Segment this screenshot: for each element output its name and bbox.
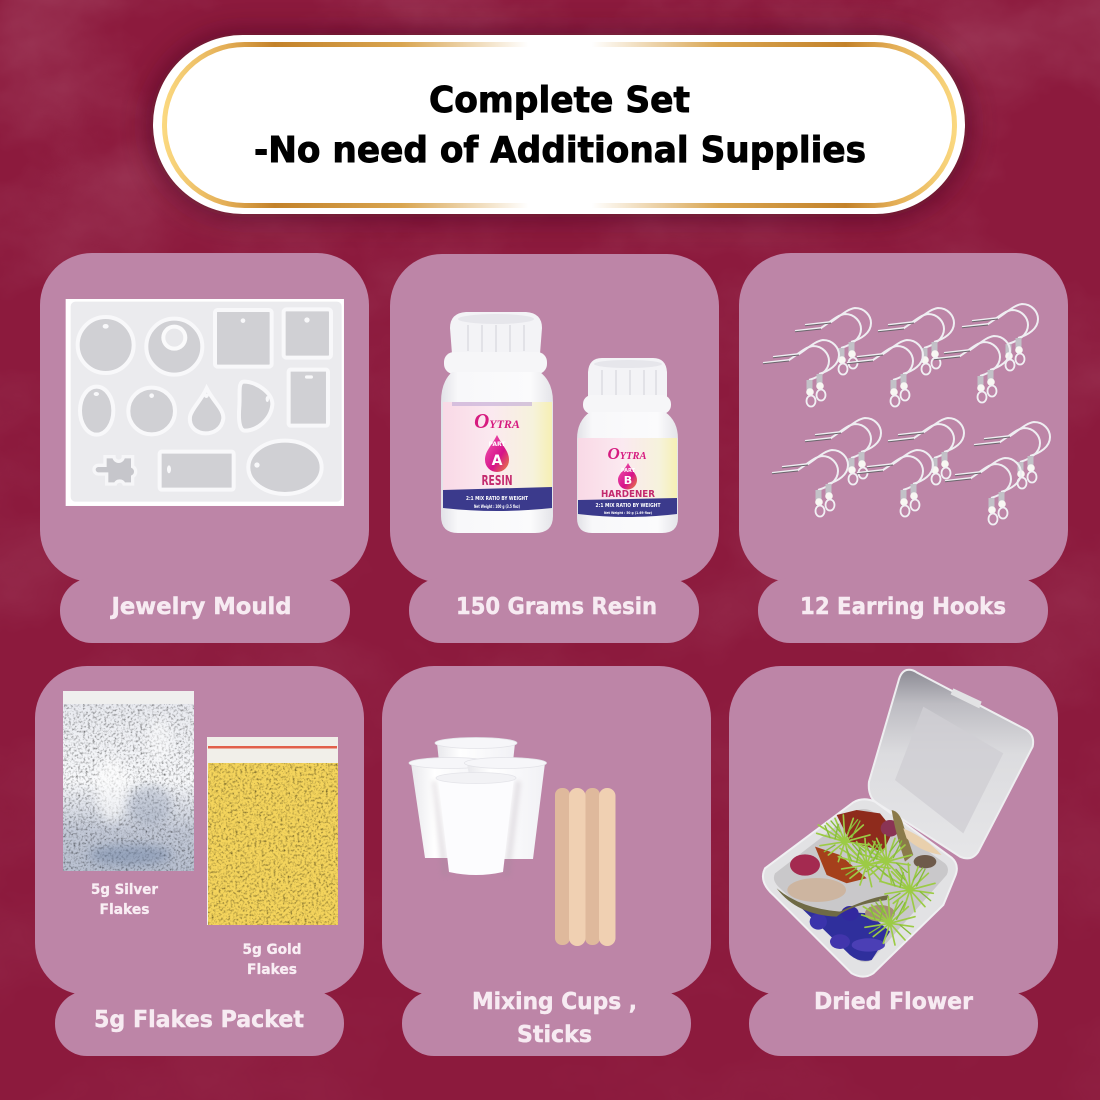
right cup — [464, 758, 546, 859]
icon: resin bottle part A: A — [492, 453, 503, 469]
silver flakes caption — [91, 882, 159, 918]
icon: resin bottle part A: OYTRA — [474, 409, 520, 433]
header banner — [150, 33, 968, 217]
box base — [763, 799, 957, 977]
front cup — [436, 772, 516, 875]
icon: resin bottle part A: RESIN — [482, 474, 512, 489]
icon: wooden sticks — [555, 788, 616, 946]
icon: hardener bottle part B — [577, 358, 678, 533]
label: Dried Flower — [814, 989, 974, 1015]
icon: silver flakes packet — [63, 691, 194, 871]
icon: resin bottle part A: PART — [489, 441, 506, 448]
panel: earring hooks — [739, 253, 1068, 643]
label: Jewelry Mould — [110, 594, 292, 620]
label: 5g Flakes Packet — [94, 1007, 304, 1033]
panel: dried flower — [729, 666, 1058, 1056]
panel: mixing cups and sticks — [382, 666, 711, 1056]
left cup — [409, 758, 491, 858]
icon: resin bottle part A: Net Weight : 100 g (3.5 floz) — [474, 504, 520, 509]
box lid — [869, 670, 1033, 858]
label: 12 Earring Hooks — [800, 594, 1006, 620]
puzzle piece — [94, 457, 136, 484]
label: 150 Grams Resin — [456, 594, 657, 620]
icon: resin bottle part A — [441, 312, 553, 533]
title: -No need of Additional Supplies — [254, 130, 866, 171]
icon: gold flakes packet — [207, 737, 338, 925]
icon: hardener bottle part B: OYTRA — [607, 444, 647, 463]
title — [254, 80, 866, 171]
label: Mixing Cups , — [472, 989, 637, 1015]
icon: hardener bottle part B: 2:1 MIX RATIO BY WEIGHT — [596, 503, 661, 509]
icon: plastic box with dried flowers — [763, 670, 1033, 977]
title: Complete Set — [429, 80, 690, 121]
panel: resin bottles — [390, 254, 719, 643]
icon: silicone mould — [66, 299, 344, 506]
gold flakes caption: Flakes — [247, 962, 297, 978]
icon: hardener bottle part B: HARDENER — [601, 489, 655, 500]
silver flakes caption: 5g Silver — [91, 882, 159, 898]
label — [472, 989, 637, 1048]
icon: hardener bottle part B: PART — [621, 468, 636, 474]
icon: hardener bottle part B: Net Weight : 50 g (1.69 floz) — [604, 510, 652, 515]
icon: paper cups — [409, 738, 546, 876]
panel: jewelry mould — [40, 253, 369, 643]
icon: resin bottle part A: 2:1 MIX RATIO BY WEIGHT — [466, 496, 528, 502]
label: Sticks — [517, 1022, 592, 1048]
gold flakes caption: 5g Gold — [242, 942, 302, 958]
panel: flakes packets — [35, 666, 364, 1056]
icon: earring hooks — [763, 304, 1050, 524]
flowers — [800, 907, 890, 961]
background: mottled burgundy — [0, 0, 1100, 856]
icon: hardener bottle part B: B — [624, 474, 632, 487]
gold flakes caption — [242, 942, 302, 978]
silver flakes caption: Flakes — [100, 902, 150, 918]
back cup — [435, 738, 517, 790]
